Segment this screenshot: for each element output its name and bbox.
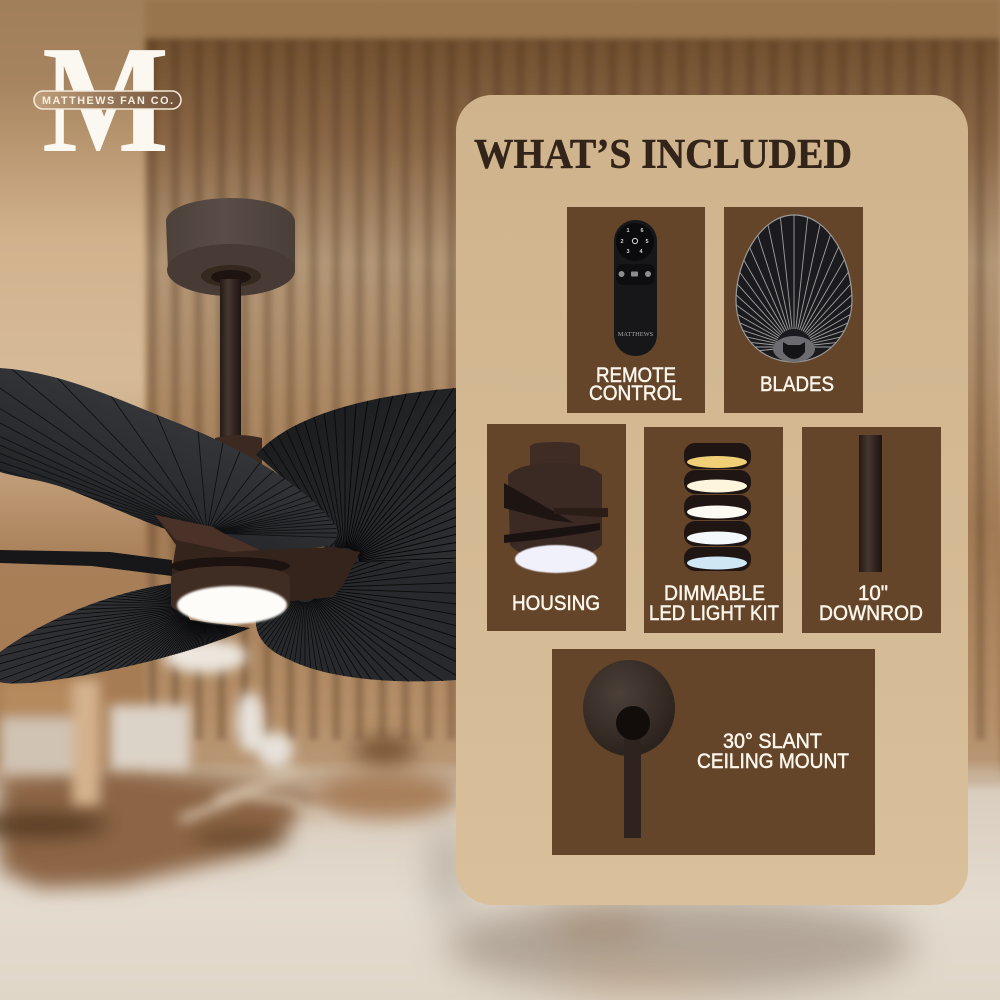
icon: housing: [504, 442, 608, 573]
blurred furniture: [0, 639, 325, 825]
label: remote control: [589, 364, 682, 405]
icon: downrod: [859, 435, 882, 572]
label: remote control: CONTROL: [589, 382, 682, 405]
blade: upper left: [0, 368, 338, 550]
icon: blade: [735, 214, 853, 363]
logo pill: MATTHEWS FAN CO.: [42, 95, 173, 107]
logo pill: [34, 91, 181, 109]
motor body and arms: [155, 515, 360, 618]
LED light: [177, 586, 287, 624]
fan canopy: [166, 198, 295, 296]
blade: lower left: [0, 584, 250, 684]
logo letter M: M: [42, 15, 169, 185]
tile: housing: [487, 424, 626, 631]
blade: lower right: [256, 542, 456, 682]
blade: upper right: [256, 388, 456, 562]
tile: dimmable led light kit: [644, 427, 783, 633]
label: dimmable led light kit: LED LIGHT KIT: [649, 602, 779, 625]
label: 30 degree slant ceiling mount: [697, 730, 849, 773]
icon: remote: MATTHEWS: [618, 331, 654, 338]
label: 10 inch downrod: 10": [858, 582, 888, 605]
icon: remote: 1: [626, 228, 630, 234]
downrod: [220, 279, 241, 444]
icon: remote: [614, 220, 657, 356]
tile: downrod: [802, 427, 941, 633]
edge-on blade: [0, 550, 172, 576]
icon: remote: 6: [640, 228, 644, 234]
label: dimmable led light kit: DIMMABLE: [664, 582, 765, 605]
panel: what's included: [456, 95, 1000, 905]
icon: slant mount: [583, 660, 675, 838]
icon: led discs: [684, 443, 751, 571]
icon: remote: 4: [639, 249, 643, 255]
ceiling fan: [0, 198, 456, 684]
tile: blades: [724, 207, 863, 413]
icon: remote: 2: [620, 239, 624, 245]
icon: remote: 3: [626, 249, 630, 255]
upper coupler: [215, 435, 262, 470]
label: housing: HOUSING: [512, 592, 600, 615]
label: blades: BLADES: [760, 373, 834, 396]
tile: remote control: [567, 207, 705, 413]
label: 30 degree slant ceiling mount: CEILING MOUNT: [697, 750, 849, 773]
label: remote control: REMOTE: [596, 364, 676, 387]
label: 30 degree slant ceiling mount: 30° SLANT: [723, 730, 822, 753]
label: dimmable led light kit: [649, 582, 779, 625]
label: 10 inch downrod: [819, 582, 923, 625]
label: 10 inch downrod: DOWNROD: [819, 602, 923, 625]
heading: WHAT’S INCLUDED: [474, 132, 852, 178]
tile: slant ceiling mount: [552, 649, 875, 855]
icon: remote: 5: [645, 239, 649, 245]
logo: [34, 15, 181, 185]
